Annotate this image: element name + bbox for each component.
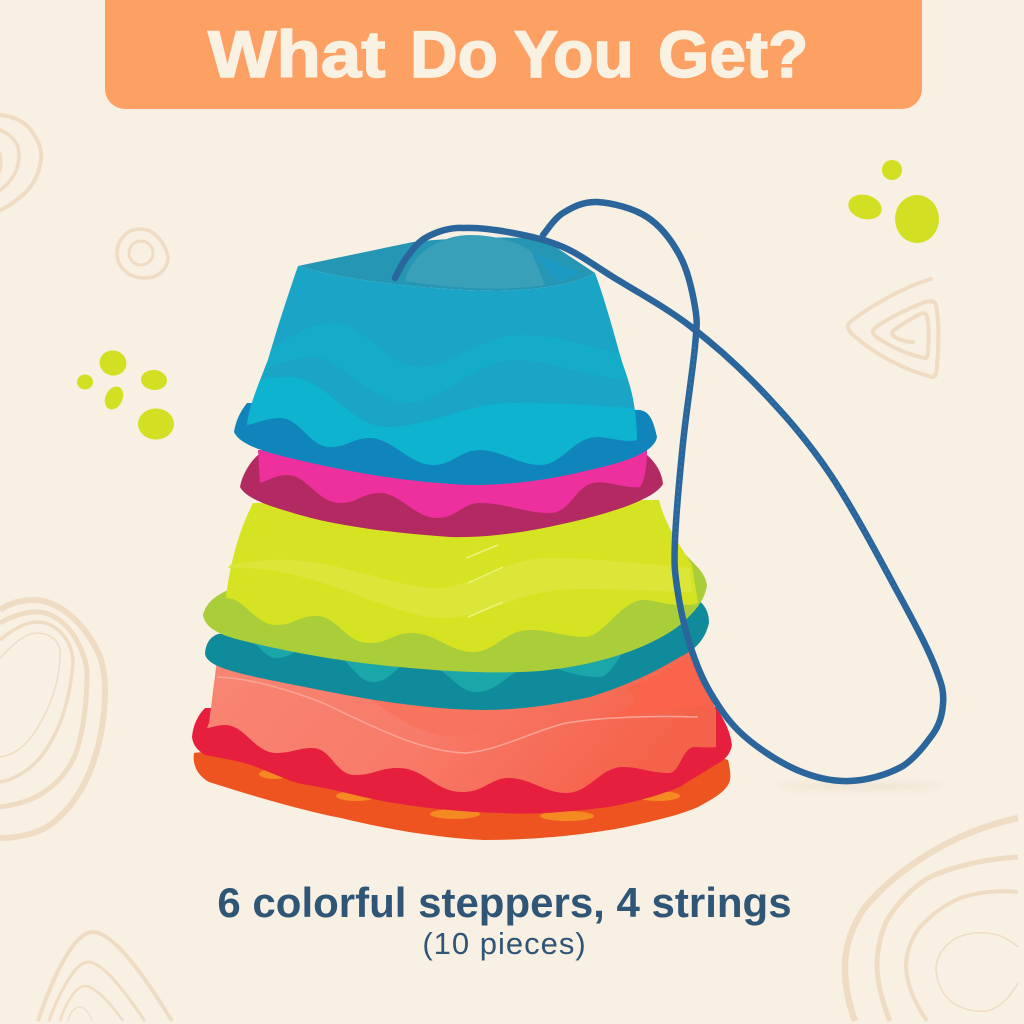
blue stepper xyxy=(234,235,657,485)
title xyxy=(207,17,808,91)
title: What xyxy=(208,17,385,91)
soft ground shadow xyxy=(775,783,945,789)
title: Get? xyxy=(658,17,808,91)
title: You xyxy=(514,17,634,91)
caption note: (10 pieces) xyxy=(422,926,587,961)
title banner xyxy=(105,0,922,109)
title: Do xyxy=(410,17,498,91)
stacked steppers illustration xyxy=(192,198,946,840)
orange stepper xyxy=(194,750,730,840)
caption: 6 colorful steppers, 4 strings xyxy=(217,879,792,926)
blue string xyxy=(395,202,943,781)
magenta stepper xyxy=(240,450,663,537)
teal stepper xyxy=(205,600,709,710)
red coral stepper xyxy=(192,650,732,814)
lime stepper xyxy=(203,500,707,672)
